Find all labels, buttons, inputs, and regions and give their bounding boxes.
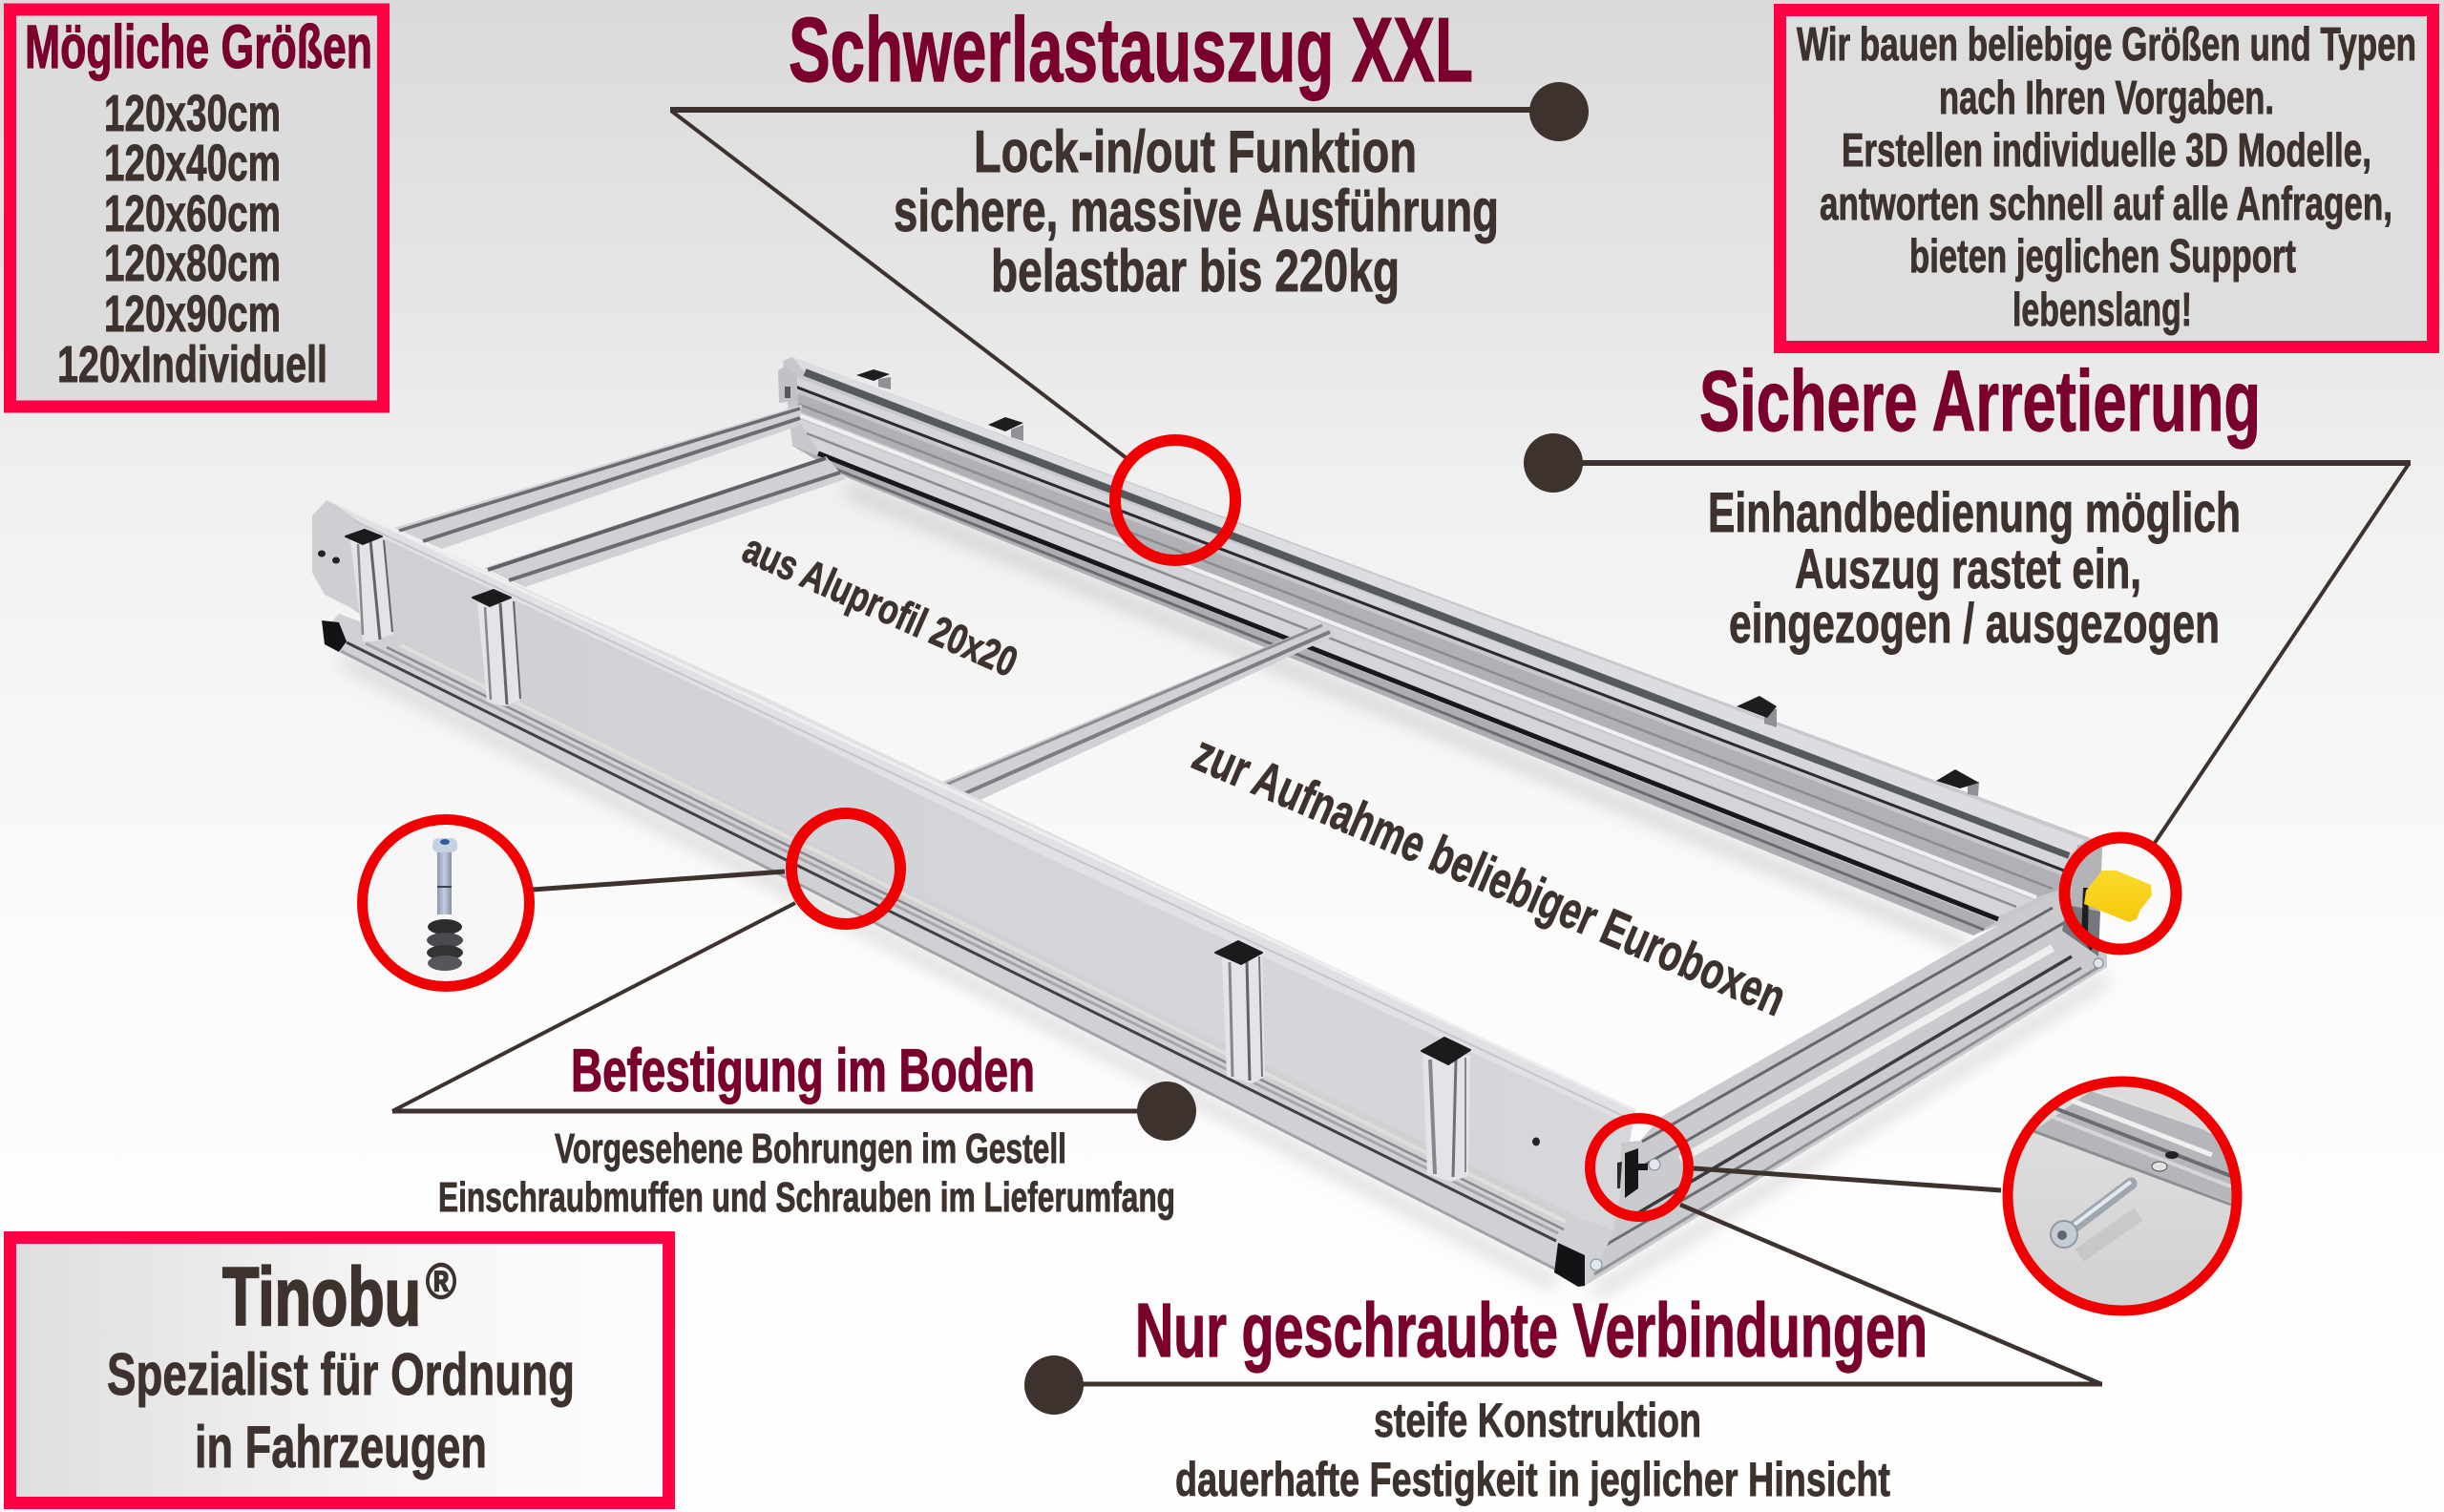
leader line (670, 110, 1537, 458)
panel: custom builds (1780, 10, 2433, 347)
leader line (392, 872, 1146, 1111)
lower front rail (325, 614, 1613, 1284)
description (1708, 482, 2241, 655)
threaded insert (427, 919, 463, 971)
dot (1529, 82, 1589, 141)
sizes list: 120x90cm (104, 285, 281, 343)
product illustration: aluminium pull-out frame (312, 357, 2152, 1293)
description (1175, 1394, 1890, 1506)
sizes list: 120x30cm (104, 85, 281, 142)
custom builds text: bieten jeglichen Support (1909, 231, 2296, 283)
right short rails (1551, 891, 2107, 1286)
icon: screw and insert detail (363, 819, 529, 987)
heading: Befestigung im Boden (571, 1038, 1035, 1104)
back rail (783, 357, 2100, 935)
description: sichere, massive Ausführung (894, 178, 1499, 244)
panel holes (318, 550, 1540, 1145)
front panel top lip (327, 499, 1635, 1122)
brand name: Tinobu (222, 1251, 421, 1343)
custom builds text: nach Ihren Vorgaben. (1939, 73, 2274, 124)
brand slogan: in Fahrzeugen (195, 1415, 487, 1480)
dot (1524, 433, 1583, 493)
back caps with stems (856, 369, 1979, 796)
sizes list: 120x40cm (104, 135, 281, 192)
heading: Schwerlastauszug XXL (789, 0, 1473, 101)
description: belastbar bis 220kg (991, 239, 1400, 304)
floor text: aus Aluprofil: aus Aluprofil 20x20 (736, 525, 1024, 686)
callout: Schwerlastauszug XXL (670, 0, 1589, 458)
sizes heading: Mögliche Größen (25, 12, 372, 81)
callout: Sichere Arretierung (1524, 354, 2411, 843)
sizes list (57, 85, 327, 393)
black post caps (346, 530, 1470, 1064)
panel: possible sizes (10, 10, 384, 407)
black end caps (322, 620, 1585, 1287)
handle bracket (2081, 888, 2096, 951)
marker circle: handle (2064, 838, 2177, 949)
short rail far left (394, 405, 802, 549)
leader line (1074, 1168, 2102, 1384)
yellow handle (2084, 871, 2152, 922)
marker circle: corner joint (1591, 1119, 1688, 1216)
marker circle: back rail (1115, 440, 1235, 560)
description: Vorgesehene Bohrungen im Gestell (555, 1125, 1066, 1172)
back rail end bracket (778, 367, 797, 403)
icon: bolt detail (2003, 1077, 2242, 1315)
front panel face (312, 499, 1635, 1231)
floor text: Euroboxen: zur Aufnahme beliebiger Euroboxen (1185, 724, 1794, 1027)
marker circle: floor fixing (791, 813, 900, 924)
soft shadows (344, 489, 2107, 1293)
description: steife Konstruktion (1374, 1394, 1701, 1447)
dot (1137, 1082, 1196, 1141)
brand slogan: Spezialist für Ordnung (107, 1342, 575, 1408)
upright posts (350, 536, 1470, 1182)
callout: Befestigung im Boden (392, 872, 1196, 1221)
cross bar (936, 622, 1337, 807)
description: eingezogen / ausgezogen (1729, 593, 2220, 655)
registered mark: ® (426, 1254, 456, 1310)
description (438, 1125, 1175, 1221)
bracket at front right corner (1591, 958, 2103, 1270)
description: Einhandbedienung möglich (1708, 482, 2241, 544)
callout: Nur geschraubte Verbindungen (1024, 1168, 2102, 1506)
end bracket right with dark gap (2062, 845, 2102, 956)
sizes list: 120x60cm (104, 185, 281, 242)
description: Einschraubmuffen und Schrauben im Lieferumfang (438, 1174, 1175, 1221)
description: dauerhafte Festigkeit in jeglicher Hinsicht (1175, 1453, 1890, 1506)
brand slogan (107, 1342, 575, 1480)
description (894, 119, 1499, 304)
custom builds text: lebenslang! (2012, 284, 2192, 336)
short rail second (484, 456, 846, 587)
screw (432, 838, 457, 914)
sizes list: 120x80cm (104, 235, 281, 292)
description: Auszug rastet ein, (1795, 538, 2141, 600)
dot (1024, 1355, 1084, 1415)
custom builds text (1797, 19, 2416, 336)
panel: brand (10, 1237, 668, 1502)
sizes list: 120xIndividuell (57, 336, 327, 393)
leader line (1575, 463, 2411, 843)
description: Lock-in/out Funktion (974, 119, 1417, 185)
heading: Nur geschraubte Verbindungen (1135, 1288, 1928, 1373)
